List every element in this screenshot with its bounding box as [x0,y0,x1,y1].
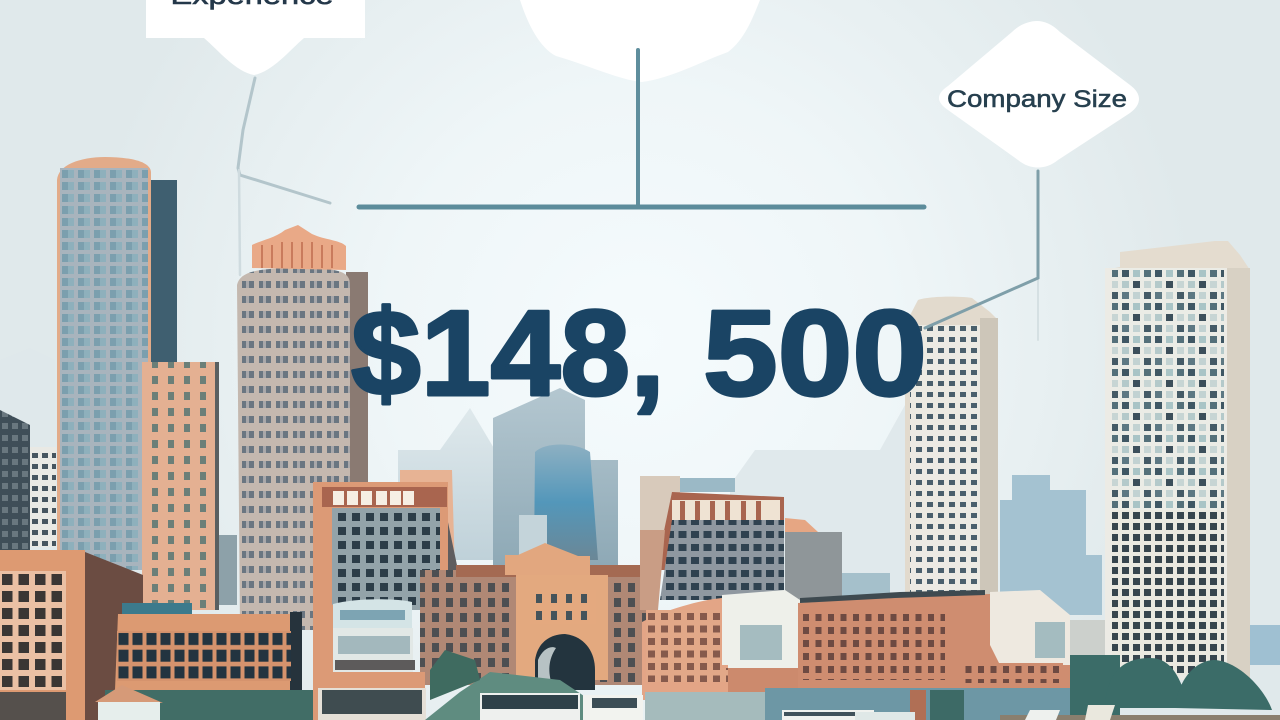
building: right beige tower [905,297,998,600]
ground greenery left [105,690,320,720]
building: small pavilion [95,685,163,720]
boats: harbor [583,695,1115,720]
callout: Company Size: Company Size [947,86,1127,113]
callout: Experience [146,0,365,75]
building: left dark tower [0,410,30,550]
building: far right tower [1105,241,1250,680]
building: right grey office [640,476,842,610]
building: arched hotel [420,543,658,690]
building: tan midrise [142,362,219,610]
trees: right shoreline [1070,655,1272,715]
building: low brick block [115,603,302,692]
building: central grey office [313,470,458,610]
building: left white tower [30,447,56,547]
building: left brick corner [0,550,143,720]
building: round tower with crown [237,225,368,630]
headline figure: $148, [351,285,665,421]
headline figure: 500 [703,285,927,421]
connector lines: left and center [238,50,1038,340]
haze skyline: background buildings [0,348,1280,665]
building: long brick block with white wing [798,590,1105,688]
connector line: Company Size [925,171,1038,328]
building: salmon harbor block with white wing [642,590,800,720]
callout: Company Size [939,21,1139,168]
trees: centre foreground [425,650,590,720]
building: white glass block [313,599,426,720]
callout: center blob [520,0,760,82]
building: tall round glass tower [57,157,177,570]
headline figure [351,285,927,421]
waterfront: water and ground [765,688,1280,720]
